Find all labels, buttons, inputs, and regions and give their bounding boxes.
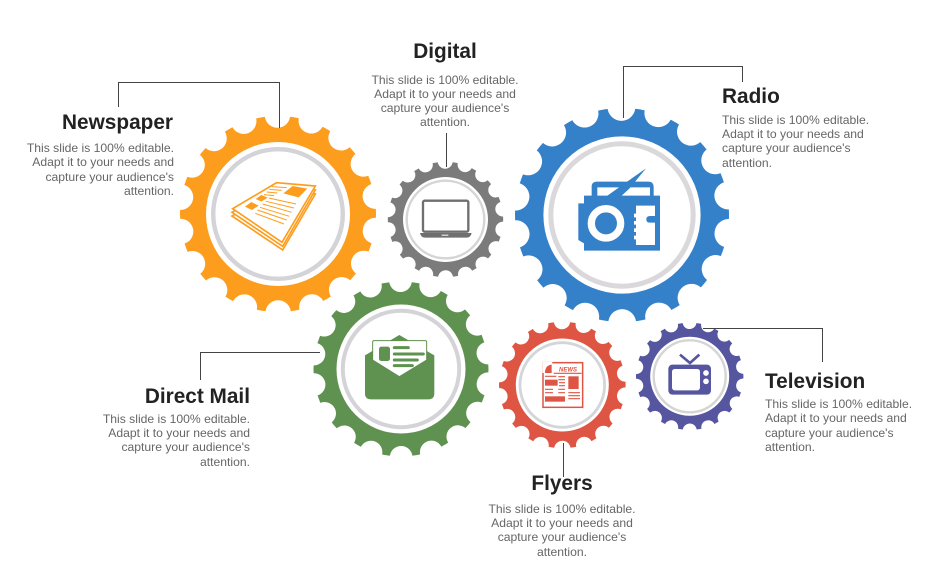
text block: Radio: capture your audience's [722, 141, 851, 155]
heading: Direct Mail: Direct Mail [145, 385, 250, 408]
leader line: flyers [562, 443, 564, 477]
gear: digital [388, 162, 503, 277]
text block: Television: Adapt it to your needs and [765, 411, 907, 425]
leader line: radio [624, 66, 742, 118]
gear: flyers [499, 322, 626, 448]
leader line: direct mail [200, 352, 320, 380]
heading: Radio: Radio [722, 85, 780, 108]
icon: news flyer: NEWS [559, 367, 577, 373]
gear: radio [515, 108, 729, 322]
text block: Direct Mail: Adapt it to your needs and [108, 426, 250, 440]
heading: Television: Television [765, 370, 865, 393]
leader line: digital [446, 133, 448, 167]
heading: Flyers: Flyers [531, 472, 593, 495]
text block: Radio: Adapt it to your needs and [722, 127, 864, 141]
icon: newspaper stack [232, 183, 315, 250]
leader line: newspaper [118, 82, 280, 128]
text block: Digital: capture your audience's [381, 101, 509, 115]
text block: Newspaper: attention. [124, 184, 174, 198]
gear: television [636, 323, 743, 430]
text block: Newspaper: This slide is 100% editable. [27, 141, 174, 155]
icon: television [668, 355, 711, 395]
heading: Digital: Digital [413, 40, 477, 63]
heading: Newspaper: Newspaper [62, 111, 173, 134]
text block: Television: capture your audience's [765, 426, 894, 440]
text block: Digital: attention. [420, 115, 470, 129]
icon: envelope with letter [365, 335, 434, 399]
leader line: television [703, 328, 822, 362]
icon: radio [578, 168, 660, 251]
text block: Flyers: Adapt it to your needs and [491, 516, 633, 530]
text block: Direct Mail: This slide is 100% editable. [103, 412, 250, 426]
icon: laptop [420, 201, 472, 238]
text block: Flyers: capture your audience's [498, 530, 626, 544]
text block: Radio: attention. [722, 156, 772, 170]
text block: Direct Mail: attention. [200, 455, 250, 469]
text block: Digital: This slide is 100% editable. [371, 73, 519, 87]
text block: Radio: This slide is 100% editable. [722, 113, 869, 127]
gear: newspaper [180, 116, 376, 312]
text block: Television: This slide is 100% editable. [765, 397, 912, 411]
text block: Television: attention. [765, 440, 815, 454]
text block: Newspaper: capture your audience's [45, 170, 174, 184]
text block: Flyers: This slide is 100% editable. [488, 502, 636, 516]
text block: Newspaper: Adapt it to your needs and [32, 155, 174, 169]
text block: Digital: Adapt it to your needs and [374, 87, 516, 101]
gear: direct mail [314, 282, 488, 456]
text block: Direct Mail: capture your audience's [121, 440, 250, 454]
text block: Flyers: attention. [537, 545, 587, 559]
